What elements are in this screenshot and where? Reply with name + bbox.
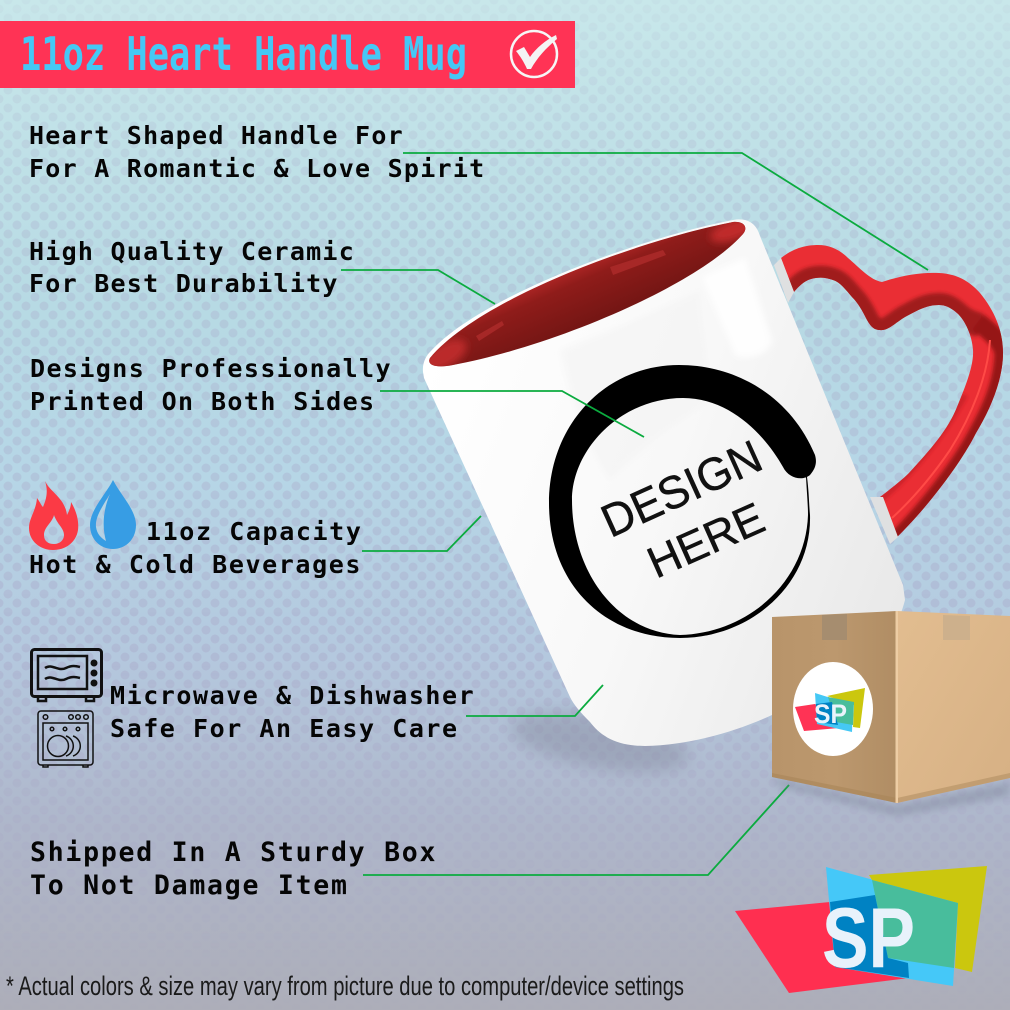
box shadow <box>772 777 1010 816</box>
box sticker <box>793 662 873 756</box>
feature text: microwave and dishwasher: Safe For An Easy Care <box>110 714 459 743</box>
title banner <box>0 21 575 88</box>
mug highlights <box>560 258 772 480</box>
mug body <box>423 219 905 746</box>
icon: check mark <box>511 31 557 77</box>
mug <box>418 212 1004 746</box>
mug interior <box>429 222 746 366</box>
logo initials: SP <box>822 891 915 986</box>
printed design circle <box>549 365 816 638</box>
feature text: capacity: 11oz Capacity <box>146 517 362 546</box>
mug handle <box>781 245 1004 540</box>
feature text: shipping: Shipped In A Sturdy Box <box>30 837 437 868</box>
feature text: printing: Printed On Both Sides <box>30 387 375 416</box>
title text: 11oz Heart Handle Mug <box>20 27 467 81</box>
design text: DESIGN <box>593 430 770 547</box>
feature text: capacity: Hot & Cold Beverages <box>29 550 362 579</box>
box tape <box>822 614 847 640</box>
feature text: ceramic: High Quality Ceramic <box>29 237 355 266</box>
feature text: shipping: To Not Damage Item <box>30 870 349 901</box>
feature text: heart handle: Heart Shaped Handle For <box>29 121 404 150</box>
icon: dishwasher <box>38 711 93 767</box>
feature text: ceramic: For Best Durability <box>29 269 339 298</box>
SP logo <box>735 866 987 993</box>
icon: flame <box>29 481 78 550</box>
leader lines <box>341 153 928 875</box>
feature text: heart handle: For A Romantic & Love Spirit <box>29 154 485 183</box>
footnote: * Actual colors & size may vary from picture due to computer/device settings <box>6 971 684 1001</box>
feature text: microwave and dishwasher: Microwave & Dishwasher <box>110 681 475 710</box>
handle sockets <box>774 258 898 544</box>
design text: HERE <box>640 494 772 588</box>
mug shadow <box>507 701 693 783</box>
shipping box <box>772 611 1010 803</box>
feature text: printing: Designs Professionally <box>30 354 392 383</box>
icon: water drop <box>90 480 136 549</box>
icon: microwave <box>32 650 102 701</box>
sticker initials: SP <box>814 699 847 729</box>
